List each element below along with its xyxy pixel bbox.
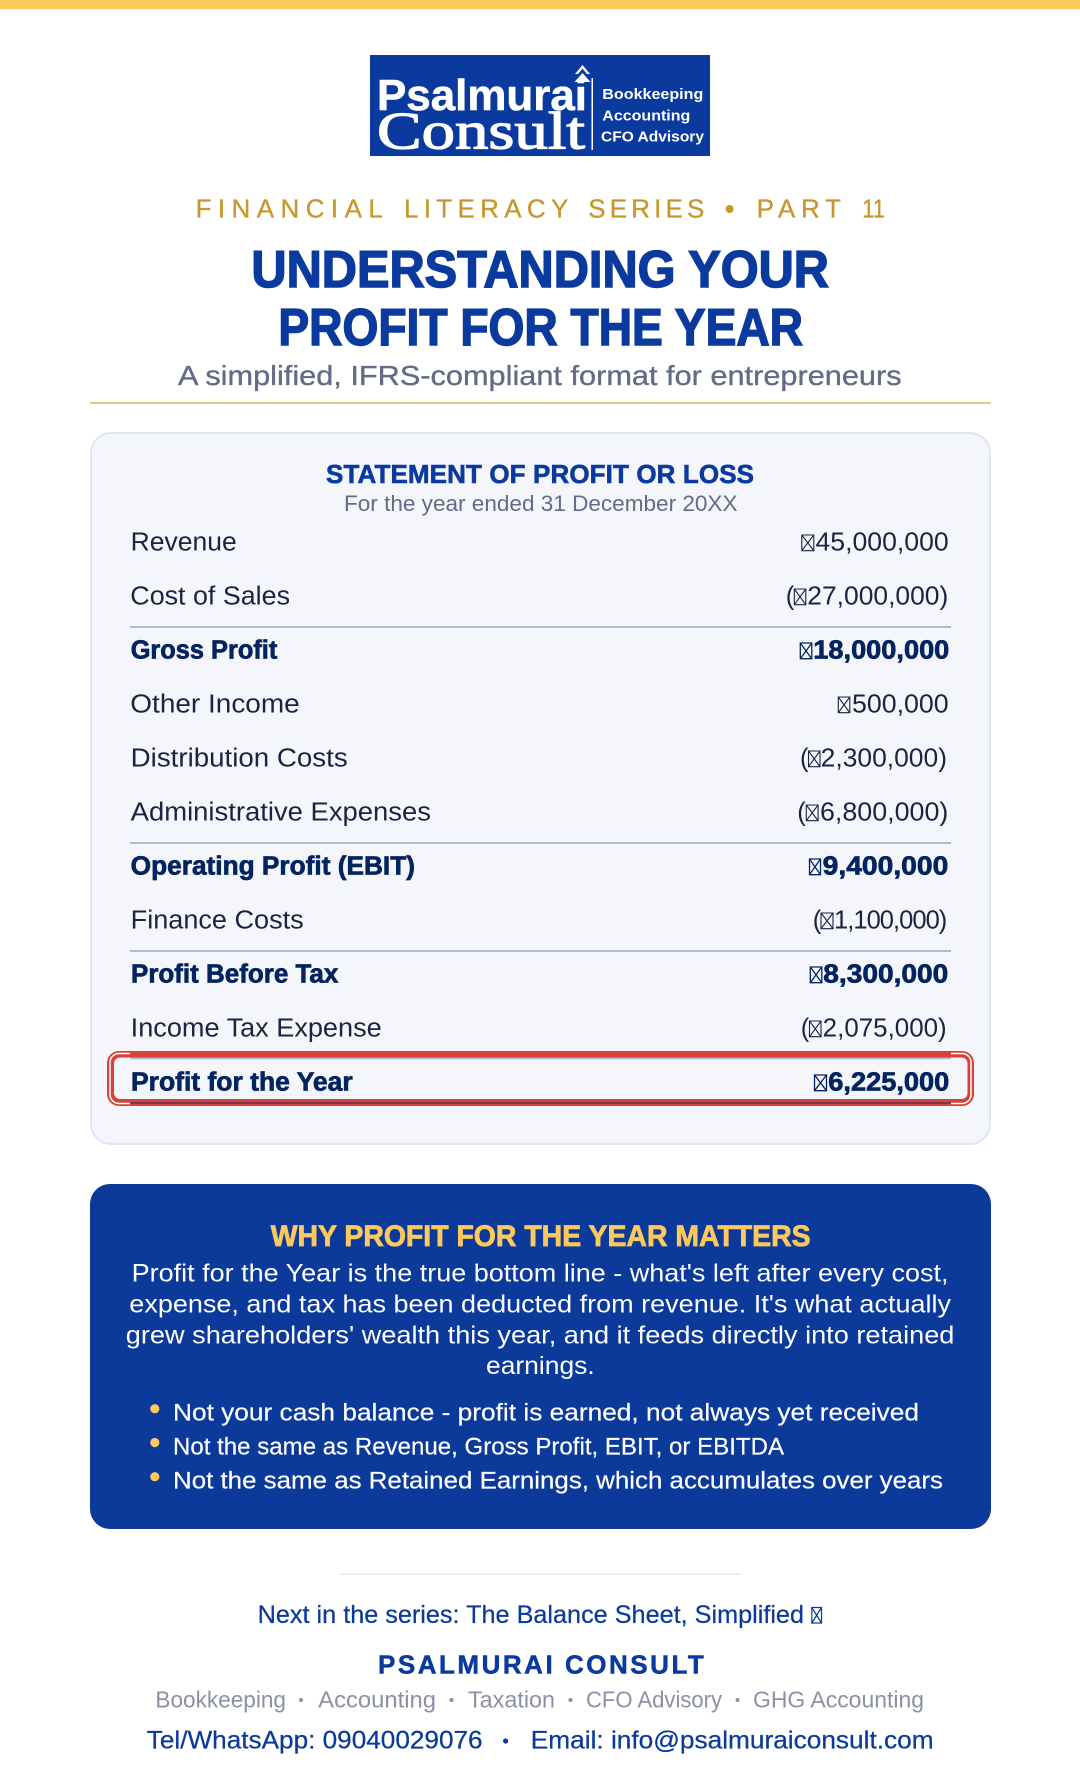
row: finance costs: 1,100,000) bbox=[834, 907, 947, 935]
statement heading: STATEMENT OF PROFIT OR LOSS bbox=[326, 459, 754, 489]
logo: Psalmurai Consult: Psalmurai bbox=[377, 71, 587, 120]
logo: Psalmurai Consult: Consult bbox=[377, 102, 585, 160]
explanatory paragraph: earnings. bbox=[486, 1352, 595, 1380]
row: profit before tax: Profit Before Tax bbox=[131, 961, 338, 989]
row: cost of sales: 27,000,000) bbox=[807, 583, 948, 611]
logo: Psalmurai Consult: Accounting bbox=[602, 108, 690, 124]
panel: why profit for the year matters bbox=[90, 1184, 991, 1529]
series eyebrow: SERIES bbox=[588, 194, 704, 224]
row: operating profit bbox=[131, 853, 948, 881]
services list: Bookkeeping bbox=[155, 1687, 286, 1713]
contact line: Email: info@psalmuraiconsult.com bbox=[531, 1727, 934, 1755]
row: administrative expenses: 6,800,000) bbox=[820, 799, 948, 827]
logo: Psalmurai Consult bbox=[370, 55, 710, 160]
highlighted row: profit for the year: Profit for the Year bbox=[131, 1069, 353, 1097]
row: revenue: Revenue bbox=[131, 529, 237, 557]
row: profit before tax bbox=[131, 961, 948, 989]
row: revenue: 45,000,000 bbox=[816, 529, 949, 557]
row: other income: Other Income bbox=[130, 691, 300, 719]
series eyebrow: FINANCIAL bbox=[196, 194, 383, 224]
row: other income: 500,000 bbox=[852, 691, 949, 719]
row: distribution costs bbox=[131, 745, 947, 773]
title bbox=[251, 240, 829, 356]
series eyebrow bbox=[196, 194, 885, 224]
logo: Psalmurai Consult: CFO Advisory bbox=[601, 130, 704, 146]
highlighted row: profit for the year bbox=[107, 1051, 974, 1106]
divider bbox=[130, 626, 951, 628]
row: income tax expense: ( bbox=[801, 1015, 810, 1043]
row: finance costs: Finance Costs bbox=[131, 907, 304, 935]
series eyebrow: LITERACY bbox=[404, 194, 568, 224]
services list: CFO Advisory bbox=[586, 1687, 722, 1713]
subtitle: A simplified, IFRS-compliant format for entrepreneurs bbox=[178, 360, 902, 391]
bullet list: Not your cash balance - profit is earned, not always yet received bbox=[173, 1400, 919, 1427]
row: distribution costs: Distribution Costs bbox=[131, 745, 348, 773]
divider bbox=[130, 950, 951, 952]
row: income tax expense bbox=[131, 1015, 947, 1043]
row: gross profit: Gross Profit bbox=[131, 637, 278, 665]
row: finance costs bbox=[131, 907, 947, 935]
row: finance costs: ( bbox=[813, 907, 822, 935]
explanatory paragraph: grew shareholders' wealth this year, and it feeds directly into retained bbox=[126, 1321, 954, 1349]
row: administrative expenses bbox=[131, 799, 948, 827]
title: UNDERSTANDING YOUR bbox=[251, 240, 829, 298]
brand name: PSALMURAI CONSULT bbox=[378, 1650, 704, 1680]
row: distribution costs: ( bbox=[800, 745, 809, 773]
row: distribution costs: 2,300,000) bbox=[821, 745, 947, 773]
contact line bbox=[147, 1727, 934, 1755]
row: other income bbox=[130, 691, 949, 719]
explanatory paragraph bbox=[126, 1260, 954, 1380]
bullet list bbox=[150, 1400, 943, 1495]
explanatory paragraph: expense, and tax has been deducted from revenue. It's what actually bbox=[129, 1291, 952, 1319]
panel heading: WHY PROFIT FOR THE YEAR MATTERS bbox=[271, 1220, 811, 1253]
row: administrative expenses: ( bbox=[797, 799, 806, 827]
services list: Taxation bbox=[468, 1687, 555, 1713]
title: PROFIT FOR THE YEAR bbox=[278, 298, 803, 356]
row: operating profit: 9,400,000 bbox=[823, 853, 948, 881]
row: cost of sales bbox=[130, 583, 948, 611]
statement period: For the year ended 31 December 20XX bbox=[344, 491, 738, 516]
row: gross profit bbox=[131, 637, 949, 665]
row: income tax expense: 2,075,000) bbox=[823, 1015, 947, 1043]
top accent bar bbox=[0, 0, 1080, 9]
row: gross profit: 18,000,000 bbox=[813, 637, 949, 665]
row: administrative expenses: Administrative Expenses bbox=[131, 799, 431, 827]
bullet list: Not the same as Revenue, Gross Profit, EBIT, or EBITDA bbox=[173, 1434, 785, 1461]
row: operating profit: Operating Profit (EBIT) bbox=[131, 853, 415, 881]
row: income tax expense: Income Tax Expense bbox=[131, 1015, 382, 1043]
panel: statement of profit or loss bbox=[91, 433, 990, 1144]
divider bbox=[130, 842, 951, 844]
highlighted row: profit for the year: 6,225,000 bbox=[828, 1069, 949, 1097]
explanatory paragraph: Profit for the Year is the true bottom line - what's left after every cost, bbox=[132, 1260, 949, 1288]
row: profit before tax: 8,300,000 bbox=[823, 961, 948, 989]
header rule bbox=[90, 402, 991, 404]
services list: Accounting bbox=[318, 1687, 436, 1713]
series eyebrow: 11 bbox=[862, 194, 885, 224]
bullet list: Not the same as Retained Earnings, which accumulates over years bbox=[173, 1468, 943, 1495]
contact line: Tel/WhatsApp: 09040029076 bbox=[147, 1727, 483, 1755]
row: cost of sales: ( bbox=[786, 583, 795, 611]
footer rule bbox=[340, 1574, 741, 1575]
next in the series: Next in the series: The Balance Sheet, Simplified bbox=[258, 1601, 804, 1629]
logo: Psalmurai Consult: Bookkeeping bbox=[602, 87, 703, 103]
row: revenue bbox=[131, 529, 949, 557]
row: cost of sales: Cost of Sales bbox=[130, 583, 290, 611]
services list bbox=[155, 1687, 924, 1713]
series eyebrow: PART bbox=[757, 194, 841, 224]
services list: GHG Accounting bbox=[753, 1687, 924, 1713]
